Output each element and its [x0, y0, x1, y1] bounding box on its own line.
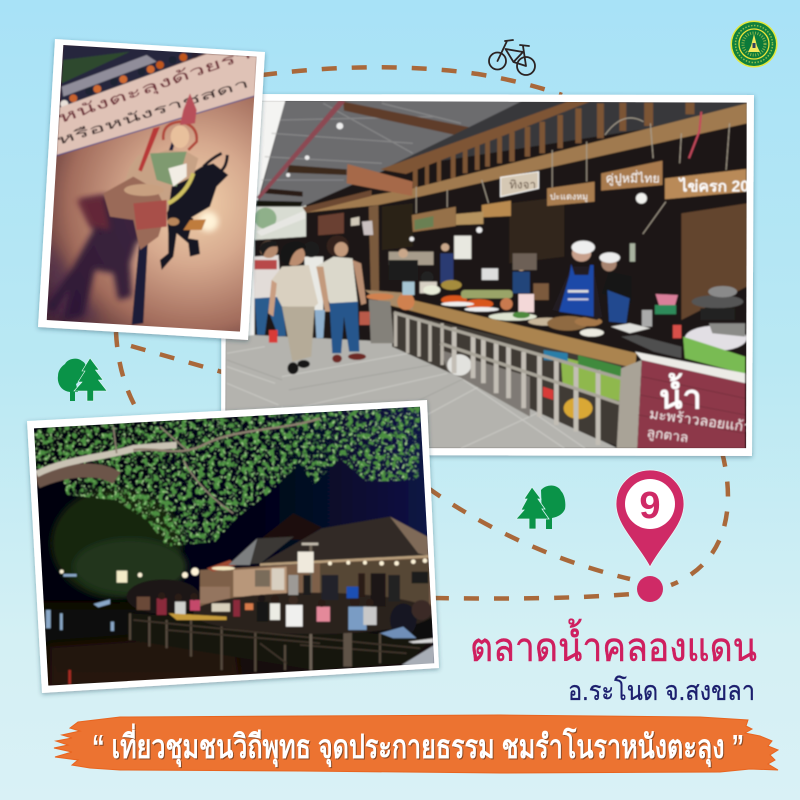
floor [225, 335, 618, 448]
counter food [382, 300, 637, 372]
signs [665, 169, 746, 199]
photo: shadow puppet: หรือหนังราชสดา [55, 76, 250, 148]
upper rafters wall [394, 102, 746, 165]
photo: market walkway [220, 90, 757, 457]
icon: trees left [58, 358, 107, 401]
dark tree [52, 488, 182, 598]
water [40, 600, 433, 690]
photo: market walkway: ลูกตาล [646, 425, 689, 446]
foliage [34, 407, 420, 547]
cooks [552, 267, 602, 320]
photo: night market [27, 400, 440, 693]
shoppers [253, 235, 370, 374]
photo: market walkway: ปะแดงหมู [550, 191, 588, 202]
banner: brush stroke [54, 715, 778, 773]
back roof [262, 513, 322, 540]
icon: map pin 9: 9 [639, 485, 661, 527]
subtitle: district: อ.ระโนด จ.สงขลา [568, 676, 755, 706]
red hanging board [347, 164, 413, 196]
kitchen [692, 295, 743, 308]
trash can [369, 299, 394, 343]
sign: coconut [635, 352, 745, 383]
deck and stilts [130, 613, 432, 670]
blurred puppet shadow [48, 191, 140, 321]
location dot [637, 576, 663, 602]
bulbs [636, 193, 647, 204]
railing [392, 311, 635, 447]
back shoppers [388, 259, 419, 266]
photo: market walkway: มะพร้าวลอยแก้ว [648, 407, 752, 436]
icon: university logo [730, 20, 778, 68]
title: ตลาดน้ำคลองแดน [470, 618, 757, 670]
building [200, 557, 432, 613]
icon: bicycle [489, 40, 535, 75]
icon: map pin 9 [616, 470, 684, 567]
photo: market walkway: ทิงจา [509, 178, 536, 191]
photo: shadow puppet: หนังตะลุงด้วยรา [56, 45, 254, 127]
branches [37, 471, 117, 482]
crowd [127, 572, 433, 638]
roof [258, 101, 523, 207]
puppet rod [131, 142, 175, 326]
photo: market walkway: คู่ปูหมี่ไทย [606, 170, 660, 187]
photo: market walkway: น้ำ [659, 372, 702, 416]
hanging wires [416, 118, 730, 234]
photo: shadow puppet [38, 39, 267, 340]
light flare [198, 212, 218, 232]
tassels [60, 52, 198, 108]
photo: market walkway: ไข่ครก 20 [678, 177, 749, 196]
back wall [681, 203, 747, 320]
dashed route paths [116, 67, 728, 599]
lights [60, 558, 427, 578]
puppet figure [103, 93, 228, 270]
icon: trees right [516, 486, 565, 529]
roofs [207, 560, 237, 572]
